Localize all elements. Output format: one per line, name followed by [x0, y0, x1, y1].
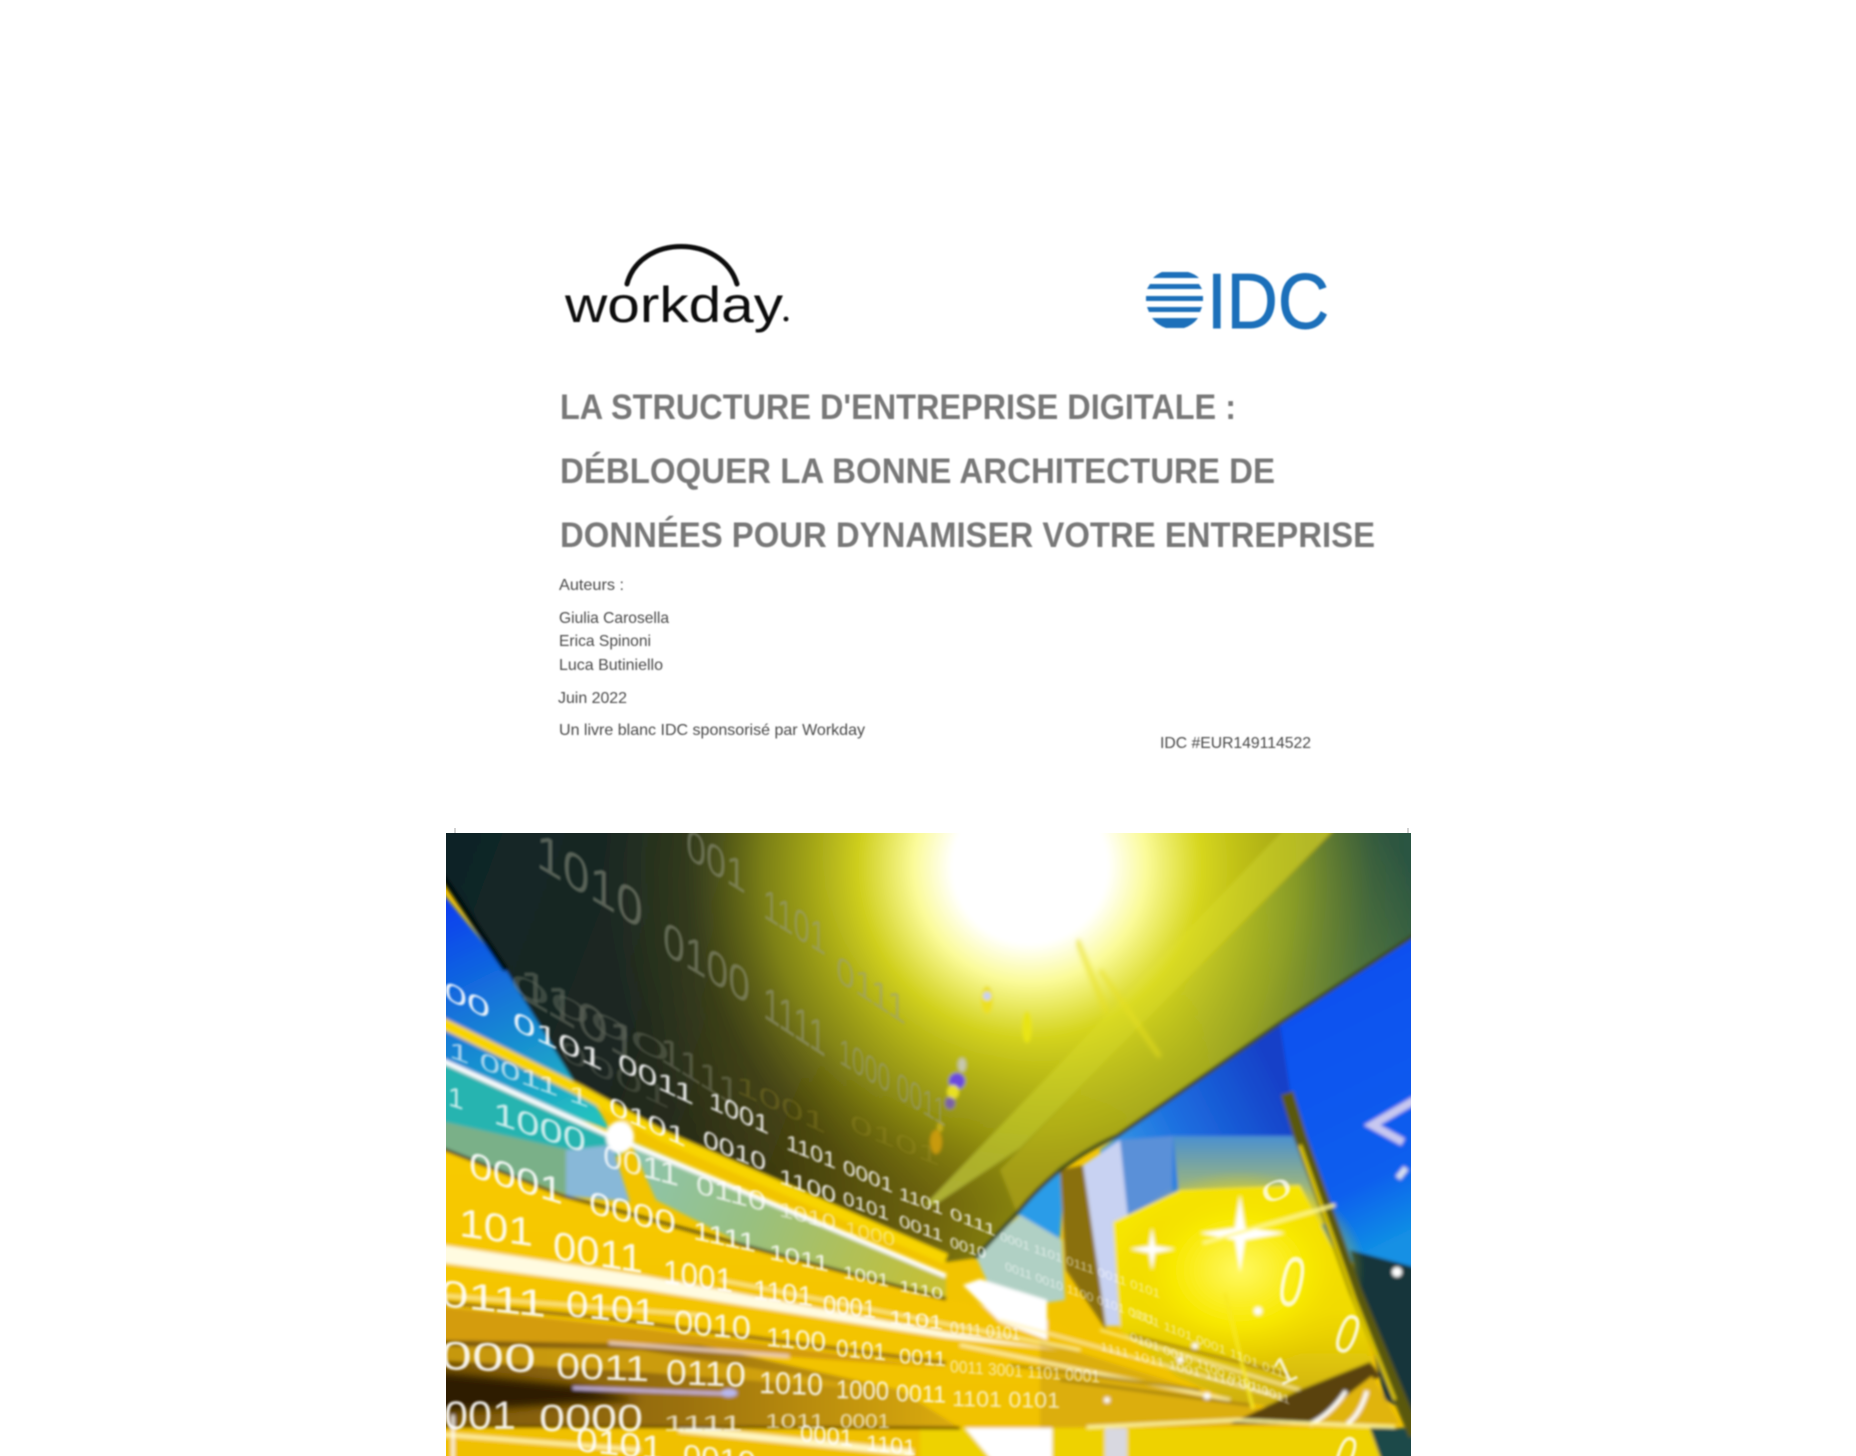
- digit row 4: 1001: [843, 1262, 889, 1291]
- small sky patch: [1017, 1170, 1062, 1240]
- ghost digits 11: 1001: [736, 1068, 826, 1140]
- ghost digits 7: 0111: [836, 945, 906, 1034]
- digit row 7: 0011: [896, 1380, 946, 1409]
- digit row 4: 1110: [899, 1277, 943, 1304]
- digit row 4: 1011: [769, 1239, 829, 1277]
- teal foreground: [446, 1064, 626, 1158]
- digit row 7: 0011: [556, 1345, 649, 1389]
- flare on streak: [606, 1121, 634, 1153]
- ghost digits 5: 1101: [763, 878, 826, 966]
- digit row 2: 0010: [703, 1125, 766, 1177]
- yellow light streak: [436, 1020, 946, 1259]
- digit row 6: 0111: [440, 1273, 546, 1326]
- digit row 5: 0111 0101: [950, 1318, 1020, 1344]
- ghost digits 1: 1010: [536, 819, 643, 941]
- digit row 6: 0101: [566, 1282, 656, 1333]
- document reference: IDC #EUR149114522: [1160, 735, 1311, 752]
- right dark trees: [1350, 1250, 1425, 1420]
- bottom road white streak: [679, 1429, 913, 1453]
- seam highlight line: [1087, 1420, 1395, 1427]
- small city digits: 1111 1011 1001 1110 0011: [1100, 1339, 1270, 1399]
- title line 1: LA STRUCTURE D'ENTREPRISE DIGITALE :: [560, 388, 1236, 427]
- digit row 8: [444, 1394, 890, 1440]
- bridge underside: [446, 833, 1334, 1264]
- brown road line: [436, 1302, 946, 1363]
- digit row 5: 1001: [663, 1253, 733, 1301]
- light speckles: [1104, 1267, 1402, 1403]
- digit row 2: [449, 1037, 986, 1263]
- digit row 2: 0010: [950, 1234, 986, 1263]
- IDC wordmark: IDC: [1207, 257, 1329, 345]
- road gold corner: [1310, 1376, 1400, 1424]
- bottom dark line: [436, 1426, 960, 1428]
- bridge dark edge: [975, 928, 1425, 1258]
- digit row 1: 0011: [618, 1046, 694, 1111]
- seam strip below: [920, 1428, 1430, 1456]
- digit row 3: 1000: [493, 1094, 586, 1160]
- left sky: [436, 885, 610, 1130]
- ghost digits 4: 1000 0011: [839, 1029, 946, 1136]
- authors and publication details: [558, 577, 1311, 752]
- chevron: [1372, 1100, 1415, 1142]
- digit row 4: 1111: [693, 1215, 756, 1258]
- lens flare: [930, 986, 1032, 1154]
- digit row 8: 1111: [663, 1411, 743, 1436]
- pale blue patch: [566, 1145, 630, 1202]
- digit row 5: 0001: [823, 1289, 876, 1325]
- pale road streaks: [436, 1280, 1300, 1405]
- large right digit 2: 0: [1272, 1240, 1313, 1324]
- digit row 5: 1101: [753, 1274, 813, 1312]
- seam right dark: [1370, 1428, 1425, 1456]
- title: [560, 388, 1375, 555]
- digit row 6: 0101: [836, 1335, 886, 1366]
- digit row 5: [459, 1200, 1020, 1344]
- digit row 3: 0011: [603, 1138, 679, 1193]
- icon: striped globe: [1146, 272, 1203, 328]
- digit row 4: [469, 1144, 943, 1304]
- workday wordmark: workday: [564, 277, 783, 333]
- vertical flare ray: [1225, 1293, 1253, 1409]
- ghost digits 6: 001: [686, 818, 746, 905]
- digit row 8: 1011: [765, 1411, 825, 1433]
- digit row 8: 0001: [840, 1411, 890, 1433]
- brown road band: [436, 1340, 960, 1428]
- left bridge edge: [440, 872, 506, 970]
- digit row 5: 0011: [553, 1223, 643, 1282]
- digit row 7: [440, 1334, 1060, 1413]
- digit row 1: 1101: [899, 1183, 943, 1219]
- yellow building mass: [1113, 1185, 1375, 1420]
- yellow flare glow: [1148, 1173, 1366, 1366]
- digit row 2: 0011: [899, 1211, 943, 1246]
- author 3: Luca Butiniello: [559, 657, 663, 674]
- digit row 1: 0111: [950, 1204, 996, 1240]
- small city digits: [1000, 1229, 1290, 1408]
- seam white flare: [965, 1428, 1052, 1456]
- seam lavender tower: [1105, 1428, 1127, 1456]
- digit row 6: 0011: [899, 1345, 946, 1371]
- grey building: [975, 1215, 1065, 1310]
- digit row 1: [444, 974, 996, 1240]
- digit row 3: [448, 1081, 895, 1251]
- digit row 6: 0010: [674, 1304, 751, 1348]
- digit row 2: 0101: [609, 1090, 686, 1153]
- digit row 7: 0110: [666, 1353, 746, 1395]
- ghost digits 9: 1111: [660, 1025, 740, 1118]
- white light streak: [436, 1058, 946, 1276]
- long flare ray: [1203, 1205, 1335, 1243]
- small city digits: 1001 1101 0001 1101 0111: [1130, 1305, 1290, 1384]
- digit row 1: 00: [444, 974, 490, 1025]
- large right digit 1: 0: [1256, 1170, 1297, 1211]
- blue-white tower: [1120, 1136, 1173, 1218]
- icon: workday arc: [627, 246, 737, 284]
- authors label: Auteurs :: [559, 577, 624, 594]
- digit row 2: 0101: [843, 1188, 889, 1226]
- right sky marks: [1398, 1168, 1406, 1178]
- logo: IDC: [1146, 257, 1329, 345]
- sun rays: [1077, 940, 1160, 1057]
- logo: Workday: [564, 246, 788, 333]
- digit row 1: 1101: [786, 1129, 836, 1174]
- digit row 7: 1000: [836, 1374, 889, 1406]
- digit row 5: 1101: [889, 1307, 943, 1335]
- cover photo: digital highway: [430, 818, 1430, 1456]
- curved road light 2: [1347, 1391, 1367, 1424]
- digit row 7: 1101 0101: [952, 1386, 1060, 1413]
- star flares: [1130, 1195, 1285, 1272]
- ghost binary digits: [510, 818, 946, 1172]
- ghost digits 8: 1101: [519, 953, 639, 1076]
- digit row 4: 0001: [469, 1144, 563, 1213]
- left vertical streak: [452, 1415, 454, 1456]
- title line 2: DÉBLOQUER LA BONNE ARCHITECTURE DE: [560, 451, 1275, 491]
- digit row 4: 0000: [589, 1184, 676, 1242]
- date: Juin 2022: [558, 690, 627, 707]
- ghost digits 10: 0000: [510, 965, 670, 1071]
- digit row 3: 0110: [696, 1168, 766, 1218]
- small city digits: 0011 0010 1100 0101 0011: [1005, 1259, 1155, 1328]
- dark road edge: [436, 1146, 946, 1299]
- digit row 6: 1100: [766, 1322, 826, 1357]
- right sky: [1257, 915, 1425, 1270]
- white binary digits: [440, 974, 1368, 1456]
- workday period: [784, 317, 788, 321]
- digit row 8: 001: [444, 1394, 516, 1438]
- pale beam stripe: [925, 820, 1343, 1205]
- ghost digits 12: 0101: [850, 1109, 940, 1172]
- orange road band: [436, 1306, 946, 1368]
- crop marks: [455, 828, 1408, 833]
- bottom left streak: [436, 1434, 640, 1450]
- cover page: [446, 242, 1411, 1456]
- title line 3: DONNÉES POUR DYNAMISER VOTRE ENTREPRISE: [560, 515, 1375, 555]
- digit row 3: 1000: [845, 1218, 895, 1251]
- digit row 2: 1100: [779, 1163, 836, 1209]
- digit row 1: 1001: [709, 1085, 769, 1140]
- white road streak: [436, 1244, 1060, 1350]
- ghost digits 13: 0001: [560, 1033, 670, 1116]
- digit row 9: 0001: [800, 1420, 853, 1453]
- digit row 1: 0101: [513, 1005, 603, 1078]
- photo shapes: [430, 820, 1430, 1456]
- ghost digits 3: 1111: [763, 974, 826, 1069]
- mixed glass building: [1173, 1136, 1330, 1225]
- road right dark cluster: [1230, 1362, 1380, 1424]
- sponsor line: Un livre blanc IDC sponsorisé par Workday: [559, 722, 865, 739]
- bright road bands: [446, 1344, 858, 1388]
- blue buildings: [1096, 1024, 1298, 1198]
- digit row 3: 1010: [779, 1197, 836, 1235]
- dark road shadow: [436, 1372, 640, 1412]
- author 2: Erica Spinoni: [559, 633, 651, 650]
- lavender dot: [721, 1389, 737, 1397]
- small city digits: 0101 0010 1100 0101 0011: [1130, 1329, 1290, 1408]
- digit row 7: 1010: [759, 1365, 823, 1402]
- right road shading: [1038, 1342, 1276, 1430]
- green road reflection: [629, 1140, 946, 1299]
- digit row 5: 101: [459, 1200, 533, 1255]
- white road glare: [963, 1279, 1047, 1340]
- digit row 3: 1: [448, 1081, 464, 1117]
- digit row 8: 0000: [539, 1398, 643, 1440]
- sun glare: [627, 833, 1411, 1258]
- digit row 1: 0001: [843, 1156, 893, 1198]
- dark tower: [1060, 1165, 1106, 1330]
- gold road: [436, 1146, 1425, 1456]
- digit row 6: [440, 1273, 1100, 1386]
- large right digit 3: 0: [1326, 1301, 1368, 1368]
- digit row 9: [576, 1420, 916, 1456]
- large right digit 4: 1: [1266, 1348, 1303, 1395]
- right pole: [1287, 1093, 1415, 1435]
- author 1: Giulia Carosella: [559, 610, 669, 627]
- ghost digits 2: 0100: [663, 911, 750, 1016]
- digit row 6: 0011 3001 1101 0001: [950, 1357, 1100, 1386]
- digit row 7: 000: [440, 1334, 536, 1381]
- right pole highlight: [1300, 1145, 1395, 1400]
- bridge side beam: [1000, 820, 1430, 1213]
- small city digits: 0001 1101 0111 0011 0101: [1000, 1229, 1160, 1301]
- digit row 2: 1 0011 1: [449, 1037, 589, 1114]
- textured green patch: [436, 1120, 570, 1196]
- curved road light 1: [1310, 1391, 1346, 1424]
- pale tower: [1083, 1140, 1130, 1326]
